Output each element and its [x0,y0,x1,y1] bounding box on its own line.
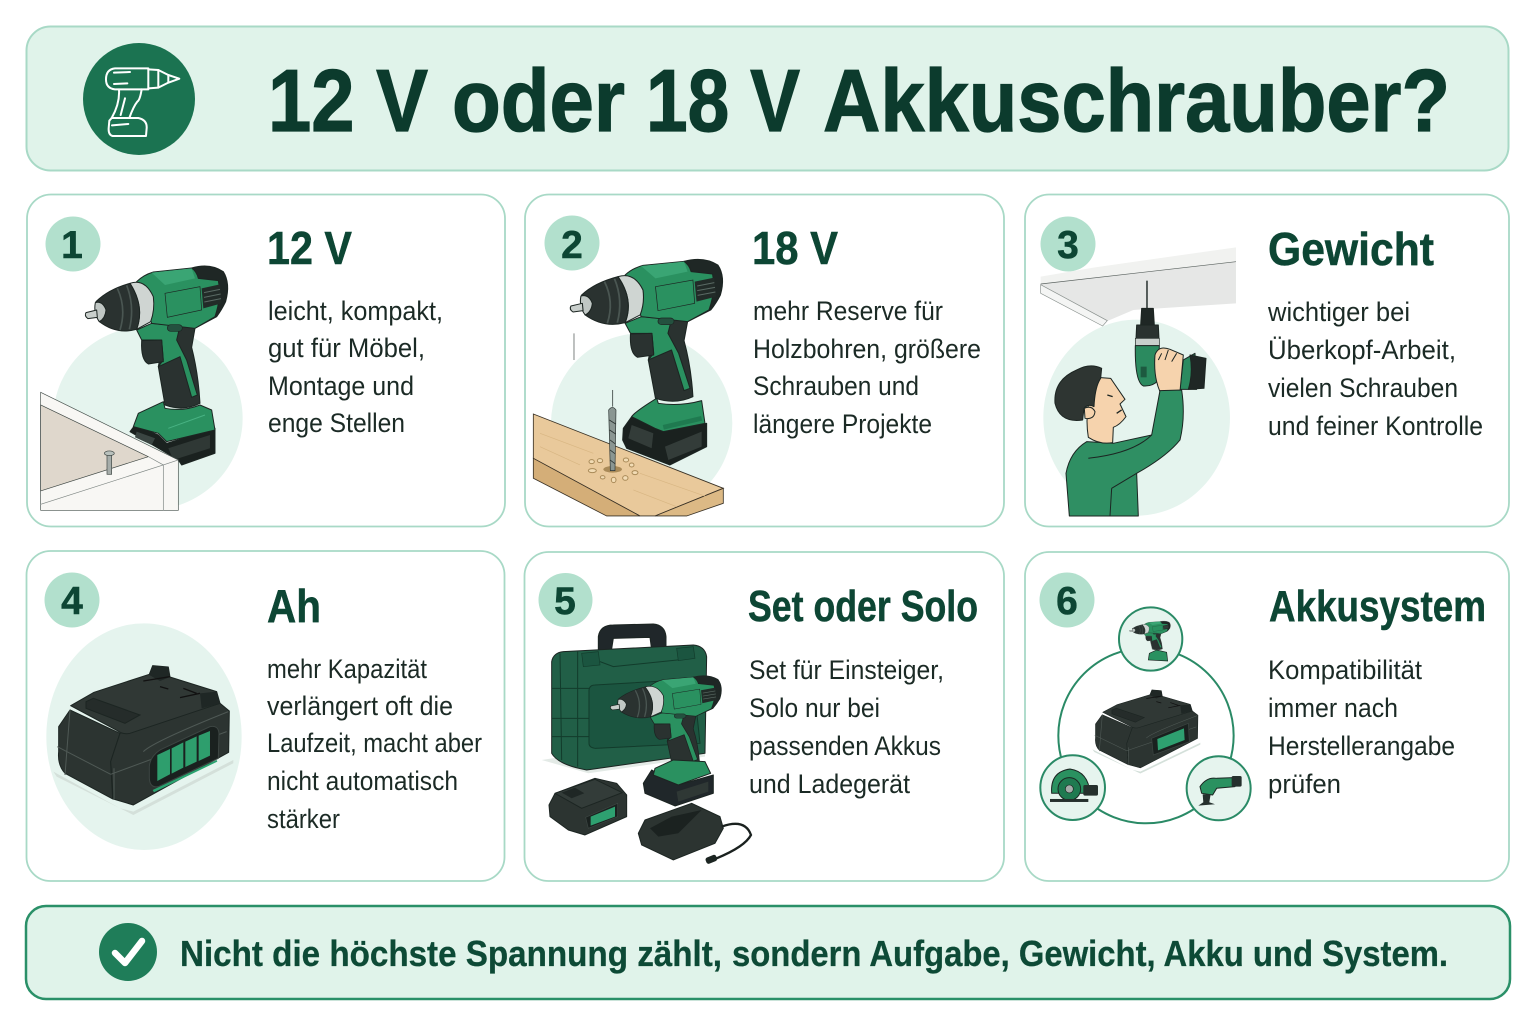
text block [1267,297,1483,441]
text block: passenden Akkus [749,731,941,761]
title: 18 V [646,51,800,150]
title: oder [452,51,625,150]
illustration: overhead drilling person [1041,247,1236,516]
text block: verlängert oft die [267,691,453,721]
badge 5 [538,573,592,627]
badge 5: 5 [554,580,576,623]
illustration: case, drill, batteries, charger [542,624,751,865]
text block: und feiner Kontrolle [1268,411,1483,441]
panel: Ah [26,551,504,881]
text block: Laufzeit, macht aber [267,728,482,758]
badge 1: 1 [61,224,83,267]
text block: mehr Reserve für [753,296,943,326]
badge 6: 6 [1056,580,1078,623]
text block: Kompatibilität [1268,655,1422,685]
text block: Solo nur bei [749,693,880,723]
illustration: drill at furniture edge [41,266,243,510]
panel: Akkusystem [1025,552,1509,881]
panel: 12 V [27,194,505,526]
illustration: battery system ring [1040,607,1251,823]
badge 2: 2 [561,224,583,267]
heading: Gewicht: Gewicht [1268,223,1434,275]
text block: stärker [267,804,340,834]
heading: Set oder Solo: Set oder Solo [748,582,978,631]
icon: multitool [1187,756,1251,820]
badge 1 [46,216,100,272]
footer callout [26,906,1510,999]
icon: circular saw [1040,755,1105,820]
text block: nicht automatisch [267,766,458,796]
text block: Herstellerangabe [1268,731,1455,761]
footer text: sondern Aufgabe, Gewicht, Akku und System. [732,933,1448,974]
heading: 18 V: 18 V [752,222,838,274]
text block: leicht, kompakt, [268,296,443,326]
heading: Ah: Ah [267,580,321,632]
badge 3: 3 [1057,224,1079,267]
illustration: battery with four charge bars [46,623,242,850]
title: Akkuschrauber? [823,51,1450,150]
icon: small drill [1119,607,1182,671]
text block: Set für Einsteiger, [749,655,944,685]
badge 2 [544,216,600,270]
badge 6 [1040,572,1094,628]
text block: längere Projekte [753,409,932,439]
text block: Überkopf-Arbeit, [1268,335,1456,365]
text block: und Ladegerät [749,769,910,799]
footer text: Nicht die höchste Spannung zählt, [180,933,722,974]
text block [749,655,944,799]
text block: immer nach [1268,693,1398,723]
icon: check mark [99,923,157,981]
text block: vielen Schrauben [1268,373,1458,403]
text block: enge Stellen [268,408,405,438]
panel: Gewicht [1025,194,1509,526]
text block: gut für Möbel, [268,333,425,363]
heading: Akkusystem: Akkusystem [1269,582,1486,631]
text block: mehr Kapazität [267,654,427,684]
text block: Holzbohren, größere [753,334,981,364]
text block: wichtiger bei [1267,297,1410,327]
title: 12 V [268,51,428,150]
badge 4 [44,572,100,628]
text block [753,296,981,439]
icon: drill badge [83,43,195,155]
header panel [26,26,1508,170]
text block [268,296,443,438]
badge 4: 4 [61,580,83,623]
illustration: drill and wooden board [533,259,732,516]
badge 3 [1040,216,1096,272]
panel: 18 V [525,194,1004,526]
panel: Set oder Solo [524,552,1004,881]
footer text [180,933,1448,974]
text block [1268,655,1455,799]
text block [267,654,482,834]
text block: Schrauben und [753,371,919,401]
text block: Montage und [268,371,414,401]
title [268,51,1450,150]
text block: prüfen [1268,769,1341,799]
heading: 12 V: 12 V [267,222,352,274]
